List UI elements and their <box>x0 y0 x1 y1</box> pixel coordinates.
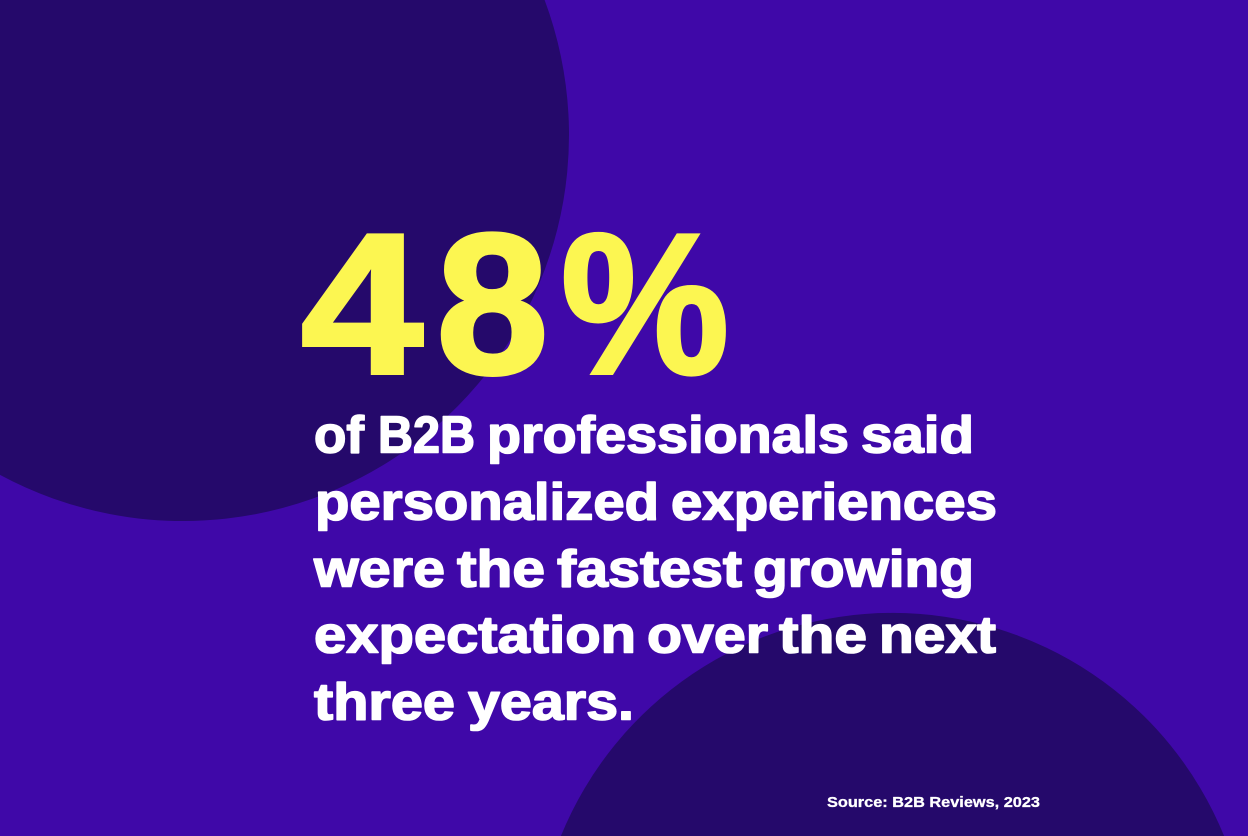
statement text: fastest <box>557 540 742 598</box>
statement text: expectation <box>314 606 636 664</box>
statement text: next <box>879 606 996 664</box>
decorative circle: bottom right <box>561 613 1224 836</box>
statement text: growing <box>753 540 974 598</box>
headline statistic: 4 <box>301 193 423 416</box>
source note: Source: B2B Reviews, 2023 <box>827 794 1040 811</box>
statement text: personalized <box>315 474 659 532</box>
headline statistic: 8 <box>436 193 548 416</box>
statement text: experiences <box>671 474 997 532</box>
headline statistic: % <box>561 193 729 416</box>
statement text: the <box>779 606 867 664</box>
statement text: the <box>457 540 545 598</box>
statement text: were <box>313 540 445 598</box>
statement text: over <box>647 606 768 664</box>
statement text: professionals <box>487 406 849 464</box>
statement text: years. <box>468 674 634 732</box>
statement text: three <box>314 674 455 732</box>
decorative circle: top left <box>0 0 569 521</box>
statement text: said <box>861 406 974 464</box>
statement text <box>313 406 997 732</box>
statement text: of <box>314 406 365 464</box>
headline statistic <box>301 193 729 416</box>
statement text: B2B <box>378 406 475 464</box>
